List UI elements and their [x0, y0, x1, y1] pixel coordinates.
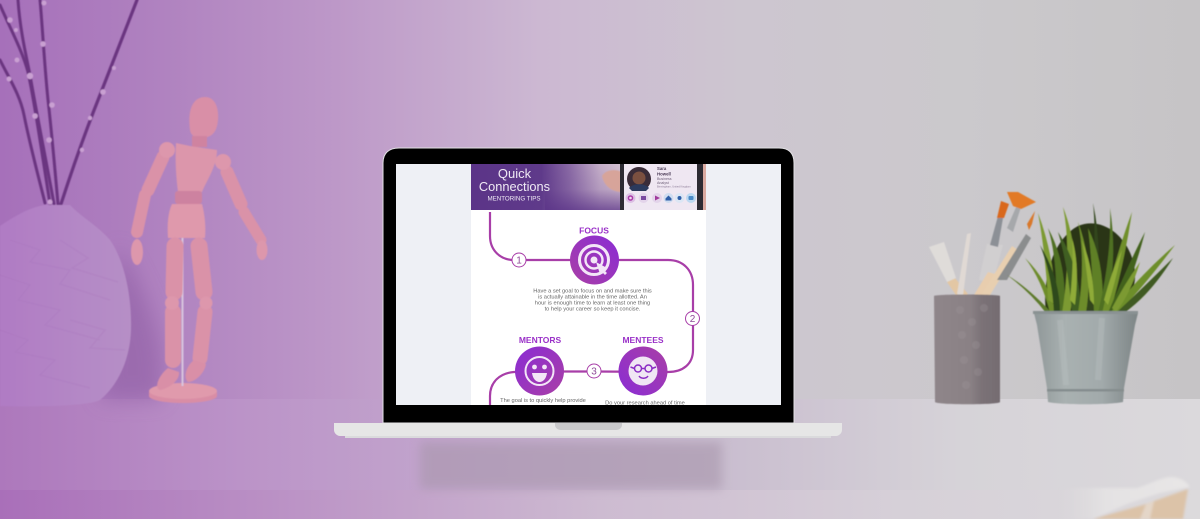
chair back in the corner	[1060, 477, 1190, 519]
mannequin head	[189, 97, 218, 138]
connecting path	[490, 212, 693, 406]
profile photo	[627, 167, 651, 187]
focus description: is actually attainable in the time allotted. An	[538, 294, 647, 300]
background: shelf front edge	[0, 490, 1200, 519]
mentors description: The goal is to quickly help provide	[500, 398, 586, 404]
thin white brush	[957, 233, 971, 296]
profile name: Analyst	[657, 181, 669, 185]
focus description	[533, 288, 652, 312]
icon: wooden mannequin	[131, 97, 268, 403]
flat brush	[947, 278, 968, 298]
mannequin hips	[168, 204, 205, 238]
header title: Quick	[498, 166, 532, 181]
grass blades	[1007, 203, 1175, 313]
clear glass area	[979, 244, 1003, 282]
infographic page	[471, 210, 706, 405]
mannequin limbs	[137, 157, 261, 360]
grass mass	[1045, 223, 1135, 313]
step number 1	[512, 253, 526, 267]
phone	[620, 164, 704, 210]
header title	[480, 168, 550, 200]
wall shadow next to vase	[100, 245, 163, 400]
background: wall	[0, 0, 1200, 401]
icon: paint brushes in cup	[929, 192, 1036, 404]
step number 2: 2	[690, 314, 696, 325]
laptop shadow on shelf	[420, 442, 722, 489]
step number 1: 1	[516, 256, 522, 266]
mentees description: Do your research ahead of time	[605, 400, 685, 406]
header title: MENTORING TIPS	[487, 196, 541, 202]
focus description: hour is enough time to learn at least one thing	[535, 300, 650, 306]
brush ferrules	[990, 216, 1003, 247]
focus description: to help your career so keep it concise.	[545, 306, 641, 312]
cup	[934, 294, 1000, 404]
branches	[0, 0, 137, 204]
focus heading: FOCUS	[579, 226, 609, 236]
profile name: Business	[657, 177, 672, 181]
laptop	[334, 148, 842, 438]
handles	[974, 272, 995, 295]
profile name	[657, 166, 691, 188]
profile name: Birmingham, United Kingdom	[657, 184, 691, 188]
mannequin joints and hands	[131, 142, 268, 310]
icon: mentees glasses face	[618, 346, 668, 396]
laptop notch	[555, 423, 622, 430]
metal pot	[1034, 313, 1138, 404]
step number 3: 3	[591, 366, 597, 378]
step number 3	[587, 364, 601, 378]
icon: vase with branches	[0, 0, 137, 406]
profile name: Sara	[657, 166, 667, 171]
background: shelf surface	[0, 399, 1200, 491]
laptop lid	[383, 148, 794, 423]
mannequin feet	[157, 368, 179, 390]
laptop base	[334, 423, 842, 436]
header banner	[471, 164, 706, 210]
mentees heading: MENTEES	[622, 335, 664, 345]
profile name: Howell	[657, 172, 671, 176]
mannequin stand	[149, 238, 217, 403]
icon: potted grass plant	[1007, 203, 1175, 404]
laptop screen	[396, 164, 781, 406]
branch buds	[6, 0, 116, 204]
mannequin neck	[192, 136, 207, 147]
icon: focus target	[570, 236, 619, 284]
mentors heading: MENTORS	[519, 335, 561, 345]
vase body	[0, 205, 131, 406]
step number 2	[686, 312, 700, 326]
hand holding phone	[602, 170, 622, 192]
app icon row	[626, 193, 696, 203]
orange bristles	[997, 201, 1009, 218]
header title: Connections	[479, 179, 550, 194]
focus description: Have a set goal to focus on and make sure this	[533, 288, 652, 294]
mannequin torso	[176, 143, 217, 192]
icon: mentors smiley	[515, 346, 564, 396]
